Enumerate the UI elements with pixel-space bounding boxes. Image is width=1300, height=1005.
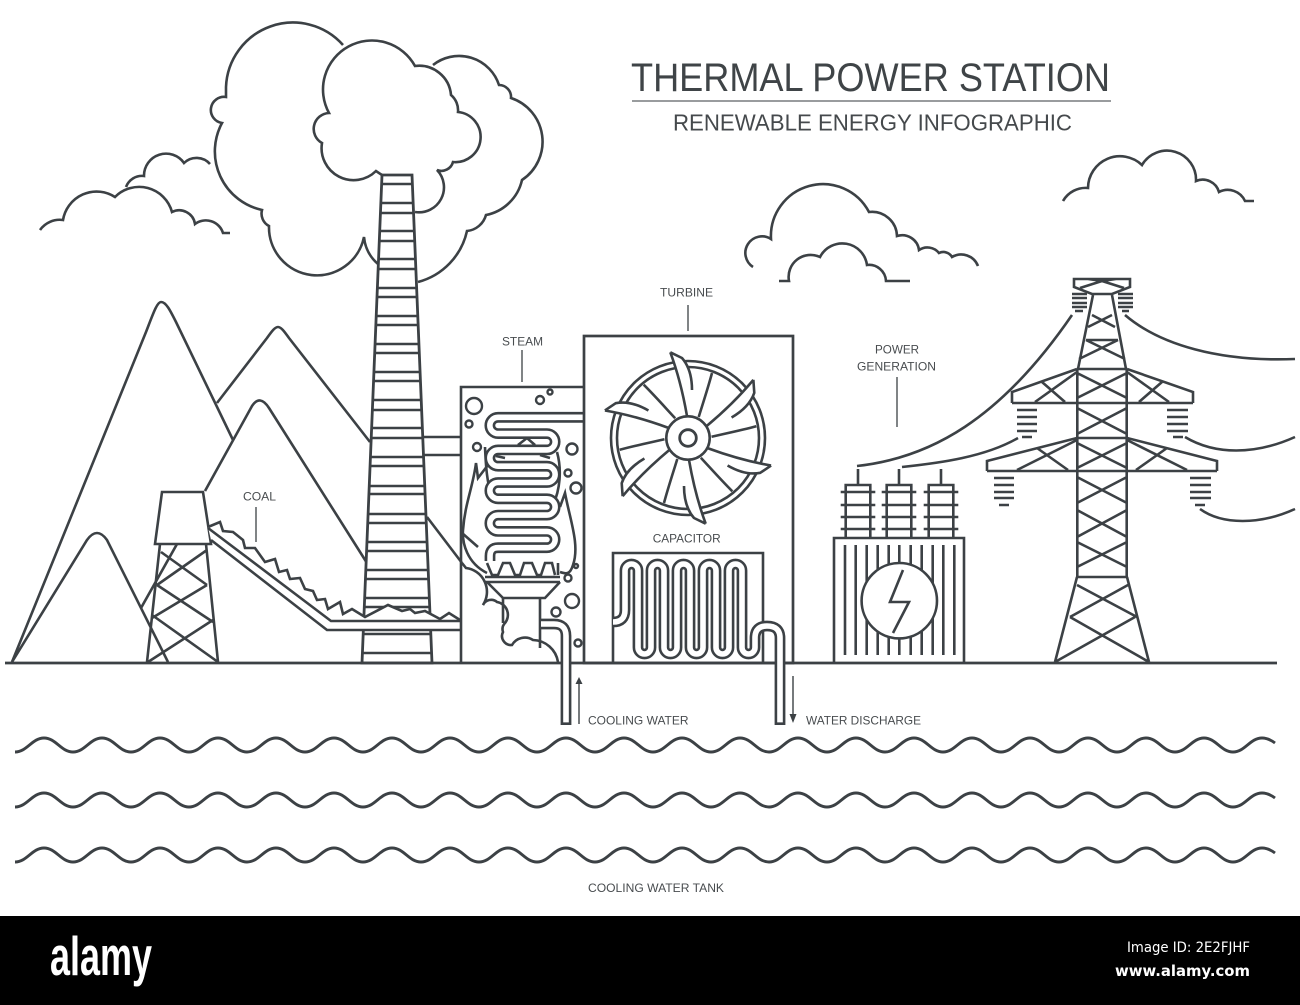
cloud: middle (745, 184, 978, 281)
label: power generation: POWER (875, 342, 919, 356)
label: water discharge: WATER DISCHARGE (806, 714, 921, 728)
footer bar (0, 916, 1300, 1005)
arrow: water discharge down (790, 676, 796, 723)
turbine fan (602, 352, 774, 524)
label: steam: STEAM (502, 334, 543, 348)
ground line (5, 662, 1277, 664)
boiler house (461, 387, 584, 663)
icon: lightning in circle (862, 563, 937, 638)
label: coal: COAL (243, 490, 276, 504)
cloud: right (1063, 151, 1254, 201)
turbine house box (584, 336, 793, 663)
cloud: left (40, 154, 230, 233)
tower body (987, 369, 1217, 577)
transmission tower (987, 279, 1217, 662)
subtitle: RENEWABLE ENERGY INFOGRAPHIC (673, 110, 1072, 136)
bubbles (466, 390, 582, 646)
steam cloud (462, 563, 558, 662)
burner (485, 563, 560, 648)
flue connectors (423, 437, 461, 455)
tower lower arm (987, 438, 1217, 471)
coal hopper tower (147, 492, 218, 662)
tower cap (1074, 279, 1130, 294)
tower upper arm (1012, 369, 1193, 403)
footer logo: alamy (50, 925, 152, 987)
coal conveyor (208, 522, 462, 630)
cooling water inlet pipe (541, 624, 566, 725)
label: cooling water tank: COOLING WATER TANK (588, 881, 724, 895)
flame (462, 438, 575, 573)
boiler box (461, 387, 584, 663)
coal mountains (12, 302, 462, 662)
label: turbine: TURBINE (660, 286, 713, 300)
label: power generation (857, 342, 936, 427)
title: THERMAL POWER STATION (631, 56, 1110, 100)
label: steam (502, 334, 543, 382)
transformer tank (834, 538, 964, 663)
title rule (632, 100, 1111, 102)
tower neck (1078, 295, 1126, 369)
label: coal (243, 490, 276, 542)
chimney (360, 174, 434, 664)
label: capacitor: CAPACITOR (653, 532, 721, 546)
title block (631, 56, 1111, 136)
label: power generation: GENERATION (857, 360, 936, 374)
serpentine pipe (490, 417, 584, 561)
insulators (841, 469, 958, 538)
transformer (834, 469, 964, 663)
capacitor (613, 553, 780, 725)
cooling ribs (845, 545, 954, 655)
label: turbine (660, 286, 713, 331)
arrow: cooling water up (576, 677, 582, 724)
label: cooling water: COOLING WATER (588, 714, 689, 728)
power lines (857, 315, 1295, 521)
smoke plume (211, 23, 543, 282)
tower insulators (994, 294, 1211, 505)
tower legs (1055, 577, 1149, 662)
water waves (15, 738, 1275, 862)
footer image id: Image ID: 2E2FJHF (1127, 940, 1250, 956)
footer url: www.alamy.com (1115, 962, 1250, 980)
